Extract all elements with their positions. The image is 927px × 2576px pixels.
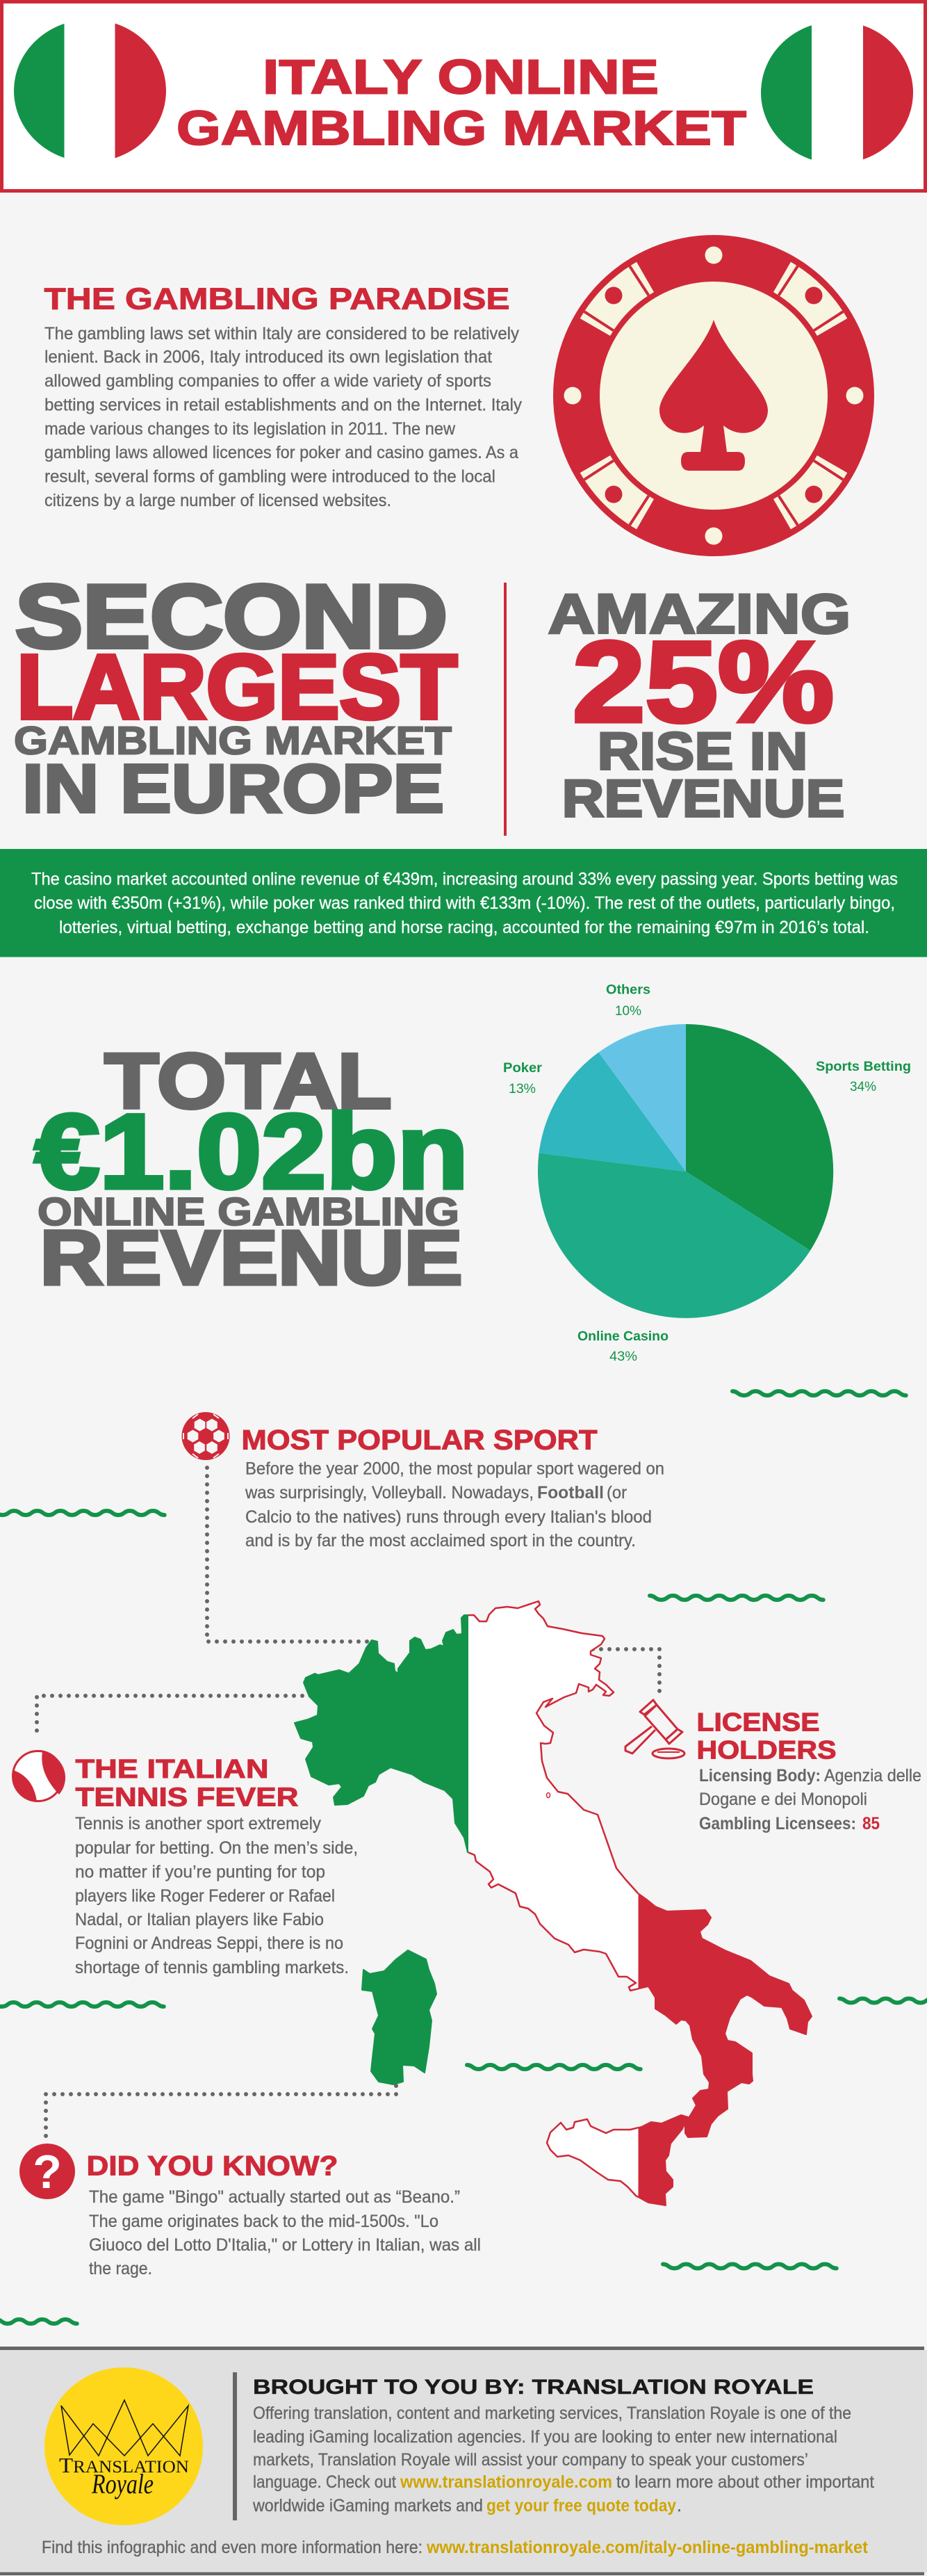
pie label: poker: 13%: [509, 1082, 536, 1096]
pie label: sports betting: Sports Betting: [816, 1060, 911, 1074]
text block: leading iGaming localization agencies. If you are looking to enter new international: [253, 2427, 837, 2447]
pie label: others: 10%: [615, 1004, 641, 1019]
big stat: total online gambling revenue: REVENUE: [40, 1215, 463, 1301]
pie label: others: Others: [606, 983, 650, 997]
pie chart: revenue share: [503, 983, 911, 1364]
heading: [696, 1708, 837, 1765]
pie label: poker: Poker: [503, 1061, 543, 1076]
text block: The game originates back to the mid-1500s. "Lo: [89, 2212, 438, 2231]
heading: THE ITALIAN: [75, 1755, 268, 1784]
pie label: online casino: 43%: [609, 1350, 637, 1364]
section: the gambling paradise: [44, 235, 874, 556]
logo: Translation Royale: TRANSLATION: [59, 2453, 189, 2477]
text block: the rage.: [89, 2259, 152, 2278]
text block: Giuoco del Lotto D'Italia," or Lottery in Italian, was all: [89, 2235, 481, 2255]
text block: Fognini or Andreas Seppi, there is no: [75, 1934, 343, 1953]
big stat: amazing 25% rise in revenue: 25%: [573, 617, 834, 745]
big stat: amazing 25% rise in revenue: [548, 583, 851, 829]
heading: [75, 1755, 299, 1812]
text block: popular for betting. On the men’s side,: [75, 1838, 358, 1858]
text block: betting services in retail establishments and on the Internet. Italy: [44, 395, 522, 414]
logo: Translation Royale: Royale: [91, 2468, 154, 2500]
big stat: total online gambling revenue: ONLINE GAMBLING: [38, 1190, 459, 1234]
text block: language. Check out: [253, 2472, 396, 2492]
text block: The game "Bingo" actually started out as “Beano.”: [89, 2187, 460, 2207]
text block: [699, 1766, 921, 1833]
text block: citizens by a large number of licensed websites.: [44, 491, 391, 510]
text block: to learn more about other important: [616, 2472, 874, 2492]
text block: The gambling laws set within Italy are considered to be relatively: [44, 324, 519, 343]
text block: Tennis is another sport extremely: [75, 1814, 321, 1833]
text block: Calcio to the natives) runs through every Italian's blood: [245, 1507, 652, 1527]
Elba: [546, 1792, 550, 1798]
title: GAMBLING MARKET: [177, 101, 746, 155]
heading: TENNIS FEVER: [75, 1783, 299, 1812]
icon: question mark: ?: [33, 2146, 62, 2198]
text block: and is by far the most acclaimed sport in the country.: [245, 1531, 636, 1550]
Sicily: white part: [546, 2118, 638, 2198]
green band with market text: [0, 849, 927, 957]
heading: MOST POPULAR SPORT: [242, 1425, 598, 1456]
title: [177, 50, 746, 155]
big stat: second largest gambling market in Europe: SECOND: [15, 567, 448, 667]
text block: lenient. Back in 2006, Italy introduced its own legislation that: [44, 348, 492, 367]
text block: made various changes to its legislation in 2011. The new: [44, 419, 456, 439]
heading: DID YOU KNOW?: [86, 2151, 338, 2182]
pie label: online casino: Online Casino: [577, 1329, 668, 1344]
text block: players like Roger Federer or Rafael: [75, 1886, 335, 1906]
text block: Agenzia delle: [824, 1766, 921, 1785]
green band with market text: The casino market accounted online revenue of €439m, increasing around 33% every passing year. Sports betting was: [31, 869, 898, 889]
big stat: second largest gambling market in Europe: [14, 567, 457, 827]
text block: Offering translation, content and marketing services, Translation Royale is one of the: [253, 2404, 851, 2423]
text block: no matter if you’re punting for top: [75, 1862, 325, 1881]
pie label: others: [606, 983, 650, 1019]
icon: football: [182, 1412, 229, 1460]
text block: Nadal, or Italian players like Fabio: [75, 1910, 324, 1929]
section: license holders: [625, 1700, 921, 1833]
find this infographic line: www.translationroyale.com/italy-online-gambling-market: [426, 2538, 869, 2557]
text block: Dogane e dei Monopoli: [699, 1790, 867, 1809]
logo: Translation Royale: [44, 2367, 203, 2525]
text block: 85: [862, 1814, 880, 1833]
big stat: total online gambling revenue: [35, 1037, 468, 1301]
text block: [245, 1459, 664, 1550]
green band with market text: lotteries, virtual betting, exchange betting and horse racing, accounted for the remaining €97m in 2016’s total.: [59, 918, 869, 937]
text block: Licensing Body:: [699, 1766, 821, 1785]
text block: [89, 2187, 481, 2278]
text block: gambling laws allowed licences for poker and casino games. As a: [44, 443, 518, 462]
big stat: amazing 25% rise in revenue: AMAZING: [548, 583, 851, 645]
text block: markets, Translation Royale will assist your company to speak your customers’: [253, 2450, 808, 2470]
big stat: amazing 25% rise in revenue: REVENUE: [561, 769, 845, 829]
text block: [252, 2404, 874, 2516]
heading: THE GAMBLING PARADISE: [44, 282, 510, 316]
find this infographic line: [42, 2538, 869, 2557]
icon: question mark: [19, 2144, 75, 2199]
text block: Gambling Licensees:: [699, 1814, 856, 1833]
header panel: [1, 1, 926, 191]
mainland: green band: [294, 1614, 468, 1854]
section: did you know: [19, 2144, 481, 2278]
text block: .: [677, 2496, 682, 2516]
Sicily: red part: [638, 2114, 689, 2206]
text block: was surprisingly, Volleyball. Nowadays,: [245, 1483, 534, 1502]
pie label: online casino: [577, 1329, 668, 1364]
heading: LICENSE: [696, 1708, 820, 1737]
section: Italian tennis fever: [13, 1751, 358, 1977]
text block: www.translationroyale.com: [400, 2472, 612, 2492]
pie label: sports betting: [816, 1060, 911, 1094]
section: most popular sport: [182, 1412, 664, 1550]
pie label: poker: [503, 1061, 543, 1096]
text block: allowed gambling companies to offer a wide variety of sports: [44, 371, 491, 391]
icon: right Italian flag circle: [761, 22, 913, 164]
green band with market text: close with €350m (+31%), while poker was ranked third with €133m (-10%). The rest of the outlets, particularly bingo,: [34, 893, 895, 913]
big stat: second largest gambling market in Europe: LARGEST: [17, 635, 457, 738]
Sardinia: [362, 1950, 436, 2084]
text block: get your free quote today: [486, 2496, 676, 2516]
mainland: red band: [638, 1893, 812, 2138]
big stat: second largest gambling market in Europe: IN EUROPE: [22, 750, 444, 827]
find this infographic line: Find this infographic and even more information here:: [42, 2538, 423, 2557]
title: ITALY ONLINE: [263, 50, 659, 104]
text block: [44, 324, 522, 510]
text block: worldwide iGaming markets and: [252, 2496, 483, 2516]
icon: left Italian flag circle: [14, 19, 167, 162]
icon: tennis ball: [13, 1751, 65, 1801]
big stat: total online gambling revenue: €1.02bn: [35, 1093, 468, 1211]
text block: (or: [607, 1483, 627, 1502]
heading: BROUGHT TO YOU BY: TRANSLATION ROYALE: [253, 2376, 814, 2399]
icon: gavel: [625, 1700, 684, 1758]
big stat: amazing 25% rise in revenue: RISE IN: [598, 722, 807, 781]
pie label: sports betting: 34%: [850, 1080, 876, 1094]
heading: HOLDERS: [696, 1735, 837, 1765]
map of Italy in flag colours: [295, 1601, 812, 2205]
big stat: second largest gambling market in Europe: GAMBLING MARKET: [14, 719, 452, 763]
text block: result, several forms of gambling were introduced to the local: [44, 467, 495, 487]
footer panel: [0, 2347, 927, 2575]
text block: Football: [537, 1483, 604, 1502]
big stat: total online gambling revenue: TOTAL: [104, 1037, 392, 1125]
icon: poker chip with spade: [553, 235, 874, 556]
mainland: white band with red outline: [468, 1601, 638, 1991]
text block: shortage of tennis gambling markets.: [75, 1958, 349, 1977]
text block: Before the year 2000, the most popular sport wagered on: [245, 1459, 664, 1478]
text block: [75, 1814, 358, 1977]
